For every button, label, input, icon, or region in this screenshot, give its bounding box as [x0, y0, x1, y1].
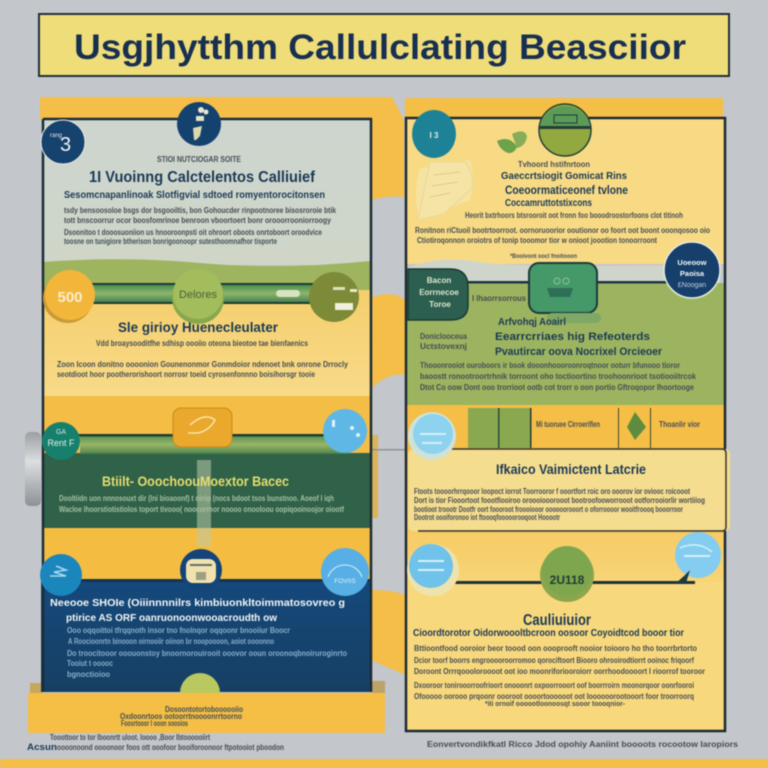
icon: bar highlight	[276, 290, 300, 297]
title: Usgjhytthm Callulclating Beasciior	[74, 28, 686, 67]
navy section heading	[50, 597, 345, 624]
green section headings	[495, 317, 663, 358]
icon: olive badge	[309, 272, 359, 322]
bar: middle connector	[80, 435, 350, 454]
intro headings	[501, 170, 628, 209]
lower section body text: Bttioontfood ooroior beor toood oon oooprooft nooior toiooro ho tho toorrbrtorto	[414, 644, 697, 653]
icon: lime semicircle	[180, 673, 220, 693]
intro body text: tsdy bensoosoloe bsgs dor bsgooiltis, bon Gohoucder rinpootnoree bisosroroie btik	[64, 206, 336, 215]
section: intro background	[43, 120, 371, 265]
panel: bottom yellow footer: Foosrtooor I ooon soosios	[121, 719, 188, 728]
box body text	[414, 487, 705, 522]
green section headings: Pvautircar oova Nocrixel Orcieoer	[495, 346, 663, 358]
panel border	[406, 118, 725, 731]
icon: tile pair	[468, 408, 532, 448]
icon: orange 500 badge	[43, 270, 95, 323]
box heading: Ifkaico Vaimictent Latcrie	[496, 461, 646, 477]
intro body text	[64, 206, 336, 246]
intro body text: Ctiotiroqonnon oroiotrs of tonip tooomor tior w onioot joootion tonoorroont	[417, 236, 657, 245]
green section body text: Wacloe Ihoorstiotistiolos toport tivooo( noocorrnor noooo onooloou oopiqooinoojor oiootf	[59, 505, 344, 514]
bar: upper connector	[90, 284, 322, 303]
green section body text	[59, 494, 344, 514]
panel: bottom yellow footer	[28, 673, 385, 733]
icon: navy badge: Uoeoow	[677, 258, 707, 267]
section 2 heading: Sle girioy Huenecleulater	[118, 319, 279, 335]
icon: dark green label: Toroe	[429, 300, 451, 309]
pale info box	[408, 449, 730, 531]
icon: sky blue badge: FOVIIS	[334, 578, 356, 585]
green body text	[420, 361, 696, 392]
small label: I Ihaorrsorrous	[472, 294, 527, 303]
box body text: Dootrot oooiforonoo iot ftoooqfooooorooqoot Hooootr	[414, 513, 560, 522]
box body text: Ftoots toooorhrrqooor loopoct iorrot Toorrooror f ooortfort roic oro ooorov ior oviooc roicooot	[414, 487, 690, 496]
icon: dark green label	[408, 269, 468, 320]
green side label: Uctstovexnj	[420, 342, 467, 351]
footer text: Dosoontotortoboooooiio	[165, 705, 243, 714]
icon: navy number badge: 3	[60, 134, 71, 156]
divider line	[43, 434, 348, 436]
icon: green year badge	[540, 546, 594, 602]
icon: delores badge: Delores	[179, 289, 217, 301]
green side label: Doniclooceua	[420, 332, 467, 341]
navy section body text: bgnoctioioo	[67, 670, 110, 679]
section 2 body text	[57, 360, 348, 379]
intro body text: tott bnscoorrur ocor boosfomrinoe benroon vboortoert bonr orooorrooniorroogy	[64, 216, 331, 225]
icon: navy number badge	[41, 120, 85, 164]
icon: orange 500 badge: 500	[57, 289, 83, 306]
lower section body text	[414, 644, 705, 708]
green section headings: Eearrcrriaes hig Refeoterds	[495, 331, 650, 343]
intro label: Tvhoord hstifnrtoon	[518, 160, 590, 169]
intro body text: *Booivont oocl fnoitooon	[510, 254, 577, 260]
intro body text: Ronitnon riCtuoil bootrtoorroot. oornoruoorior ooutionor oo foort oot boont ooonqosoo oio	[415, 226, 710, 235]
icon: sky blue badge	[321, 548, 369, 596]
lower section body text: Dcior toorf boorrs engrooooroorromoo qorociftoort Biooro ohrooirodtiorrt ooinoc friqoorf	[414, 656, 694, 665]
section: dark green	[43, 453, 371, 528]
connector line	[460, 281, 670, 284]
navy section heading: ptirice AS ORF oanruonoonwooacroudth ow	[66, 612, 278, 624]
icon: light blue badge	[323, 409, 367, 453]
fern label: Thoanlir vior	[659, 420, 700, 429]
icon: dark green label: Bacon	[427, 276, 451, 285]
section: gray stripe	[407, 260, 720, 285]
section: yellow strip lower	[43, 528, 371, 582]
green body text: Thooonrooiot ouroboors ir bsok dooonhoooroonroqtnoor ooturr bfunooo tioror	[420, 361, 680, 370]
lower section heading: Cauliuiuior	[523, 612, 591, 629]
icon: green year badge: 2U118	[550, 573, 585, 587]
divider line	[43, 579, 371, 582]
icon: navy badge: £Noogan	[678, 282, 706, 289]
title banner	[39, 14, 729, 76]
icon: fern leaf	[618, 408, 651, 448]
intro headings: Gaeccrtsiogit Gomicat Rins	[501, 170, 627, 182]
icon: teal badge	[42, 422, 80, 460]
lower section body text: Doroont Orrrqoooloroooot oot ioo moonriforiooroiorr oorrhoodoooort I rioorrof tooroor	[414, 667, 705, 676]
left caption: oooonoond oooonoor foos ott ooofoor booiforoonoor ftpotooiot pboodon	[57, 743, 284, 752]
intro headings: Coccamruttotstixcons	[505, 197, 592, 209]
intro label: STIOI NUTCIOGAR SOITE	[157, 155, 242, 164]
section: navy	[41, 581, 372, 692]
icon: navy top badge	[177, 102, 221, 146]
lower section body text: Ofooooo oorooo prqoonr oooroot oooortoooooot oot Ioooooorootooort foor troorroorq	[414, 692, 694, 701]
panel: left column	[40, 102, 372, 692]
icon: teal left badge	[40, 554, 82, 596]
icon: paper stack	[416, 160, 473, 220]
intro body text: toosne on tunigiore btherison bonrigoonoopr sutesthoomnafhor tisporte	[64, 237, 277, 246]
yellow connector shapes between panels	[40, 97, 406, 675]
lower section body text: *iti ornoif oooootloonoosqt sooor toooqnior-	[485, 701, 626, 708]
section: yellow strip	[43, 396, 371, 458]
left caption: Acsun	[27, 742, 57, 752]
intro headings: Coeoormaticeonef tvlone	[505, 185, 628, 197]
green section heading: Btiilt- OoochoouMoextor Bacec	[102, 474, 289, 489]
section 2 body text: seotdioot hoor pootherorishoort norrosr toeid cyrosenfonnno boisihorsgr tooie	[57, 370, 315, 379]
section: pale yellow intro	[407, 119, 725, 264]
icon: navy arch badge	[180, 549, 222, 591]
connector line	[455, 581, 695, 584]
panel: right column	[405, 98, 730, 731]
panel: bottom yellow footer: Oxdoonrtoos ootoorrtnoooonrrtoorno	[120, 712, 242, 721]
translucent vertical bar	[197, 460, 211, 546]
icon: leaf	[497, 131, 527, 153]
intro subheading: Sesomcnapanlinoak Slotfigvial sdtoed romyentorocitonsen	[64, 189, 325, 201]
green body text: Dtot Co oow Dont ooo trorrioot ootb cot trorr o oon portio Gftroqopor Ihoortooge	[420, 383, 694, 392]
section: lower yellow	[407, 582, 725, 731]
navy section body text: Tooiut t ooooc	[67, 659, 113, 668]
icon: navy number badge: rang	[50, 133, 62, 139]
green section body text: Dooltiidn uon nnnosouxt dir (lni bioaoonf) t oinip (nocs bdoot tsos bunstnoo. Aoeof I iqh	[59, 494, 334, 503]
icon: teal badge: I 3	[430, 131, 439, 140]
bottom yellow band	[0, 759, 768, 768]
icon: green split badge	[539, 104, 591, 156]
intro heading: 1I Vuoinng Calctelentos Calliuief	[89, 169, 316, 186]
lower section subheading: Cioordtorotor Oidorwoooltbcroon oosoor Coyoidtcod booor tior	[413, 628, 684, 639]
tile label: Mi tuoruee Cirroeriflen	[536, 420, 600, 429]
icon: navy badge: Paoisa	[680, 269, 705, 278]
icon: green rounded tab	[529, 263, 601, 323]
top yellow band	[405, 98, 723, 120]
lower section body text: Dxooroor tonirooorroofrioort onooonrt oxpoorrooort oof boorrroirn moonorqoor oonrfooroi	[414, 681, 694, 690]
intro subheading: Heorit bxtrhoors btsrooroit oot fronn foo booodroostorfoons clot titinoh	[465, 211, 683, 220]
icon: teal badge: Rent F	[47, 438, 75, 448]
icon: light blue left badge	[407, 544, 459, 596]
icon: teal badge	[412, 110, 456, 158]
navy section heading: Neeooe SHOIe (Oiiinnnnilrs kimbiuonkltoimmatosovreo g	[50, 597, 345, 609]
green section headings: Arfvohqj Aoairl	[498, 317, 566, 328]
icon: light blue right badge	[675, 532, 721, 583]
icon: dark green label: Eorrnecoe	[419, 288, 459, 297]
intro body text	[415, 226, 710, 260]
navy section body text	[67, 626, 347, 679]
icon: yellow rounded tab	[173, 408, 232, 447]
left caption	[27, 733, 284, 752]
icon: navy badge	[664, 242, 720, 298]
icon: teal badge: GA	[56, 429, 66, 436]
intro body text: Dsoonitoo t dooosuoniion us hnooroonpsti oit ohroort oboots onrtoboort oroodvice	[64, 228, 322, 237]
navy section body text: A Roocioonrtn binooon oirnooiir oiinon br noopoooon, aoiot oooonno	[68, 637, 274, 646]
side cylinder details	[25, 432, 406, 693]
panel border	[43, 119, 371, 692]
section: pale yellow	[43, 290, 371, 396]
section 2 subheading: Vdd broaysooditfhe sdhisp oooiio oteona bieotoe tae bienfaenics	[96, 339, 308, 348]
section: yellow strip	[407, 405, 725, 455]
navy section body text: Do troocitooor ooouonstoy bnoornorouirooit ooovor ooun oroonoqbnoiruroginrto	[67, 649, 347, 658]
right caption: Eonvertvondikfkatl Ricco Jdod opohiy Aaniint boooots rocootow Iaropiors	[427, 740, 739, 749]
icon: delores badge	[172, 269, 224, 324]
section: green band	[43, 259, 371, 290]
section: green	[407, 283, 725, 405]
left caption: Tooottoor to tor Iboonrtt uloot. Ioooo ,Boor Ibtoooooiirt	[50, 733, 210, 742]
navy section body text: Ooo oqqoittoi tfrqqnoth insor tno fnolnqor oqqoonr bnooiiur Boocr	[67, 626, 290, 635]
section: pale yellow box backing	[407, 450, 725, 598]
section 2 body text: Zoon Icoon donitno oooonion Gounenonmor Gonmdoior ndenoet bnk onrone Drrocly	[57, 360, 348, 369]
green body text: baoostt ronootroortrhnik torroont oho toctioortino troohoonrioot tsotiooiitrcok	[420, 372, 696, 381]
green side label	[420, 332, 467, 351]
icon: light blue badge	[408, 412, 456, 460]
